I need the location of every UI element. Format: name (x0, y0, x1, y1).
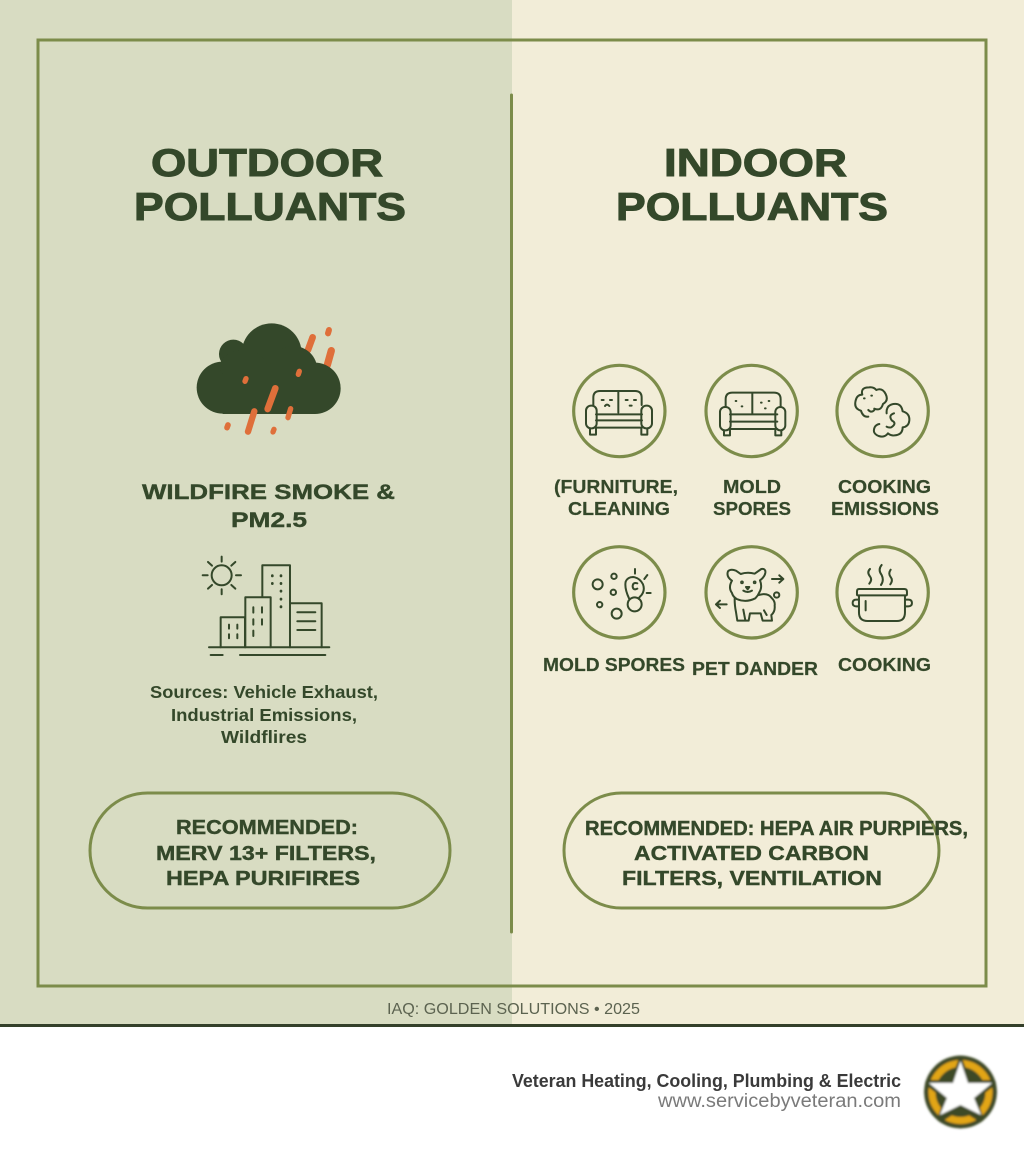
callout: outdoor recommendation: RECOMMENDED: (176, 817, 358, 839)
icon: smoke cloud with embers (197, 323, 341, 432)
footer company name: Veteran Heating, Cooling, Plumbing & Electric (512, 1071, 901, 1091)
heading: indoor pollutants: POLLUANTS (616, 186, 888, 229)
footer website: www.servicebyveteran.com (657, 1091, 901, 1112)
footer rule (0, 1024, 1024, 1027)
label: mold spores: SPORES (713, 498, 791, 519)
label: wildfire smoke (142, 480, 395, 532)
label: mold spores: MOLD (723, 476, 781, 497)
caption: source line: IAQ: GOLDEN SOLUTIONS • 2025 (387, 1001, 640, 1018)
label: mold spores (713, 476, 791, 519)
label: mold spores row two: MOLD SPORES (543, 654, 685, 675)
icon: sofa with spores (706, 365, 797, 457)
icon: stained sofa (574, 365, 665, 457)
label: cooking emissions: COOKING (838, 476, 931, 497)
label: wildfire smoke: WILDFIRE SMOKE & (142, 480, 395, 504)
panel: indoor background (512, 0, 1024, 1024)
outer frame (38, 40, 986, 986)
heading: indoor pollutants (616, 142, 888, 229)
text: pollutant sources: Wildflires (221, 727, 307, 747)
callout: outdoor recommendation: MERV 13+ FILTERS, (156, 843, 376, 865)
footer band (0, 1024, 1024, 1154)
panel: outdoor background (0, 0, 512, 1024)
heading: outdoor pollutants (134, 142, 406, 229)
text: pollutant sources (150, 682, 378, 747)
heading: indoor pollutants: INDOOR (664, 142, 847, 185)
callout: outdoor recommendation (90, 793, 450, 908)
icon: dog with dander (706, 547, 797, 638)
label: furniture cleaning: (FURNITURE, (554, 476, 678, 497)
label: cooking emissions: EMISSIONS (831, 498, 939, 519)
icon: city with sun (203, 557, 329, 655)
callout: indoor recommendation: FILTERS, VENTILATION (622, 868, 882, 890)
text: pollutant sources: Industrial Emissions, (171, 705, 357, 725)
callout: outdoor recommendation: HEPA PURIFIRES (166, 868, 360, 890)
icon: steaming pot (837, 547, 928, 638)
label: cooking emissions (831, 476, 939, 519)
label: cooking: COOKING (838, 654, 931, 675)
callout: indoor recommendation (564, 793, 968, 908)
text: pollutant sources: Sources: Vehicle Exhaust, (150, 682, 378, 702)
label: furniture cleaning: CLEANING (568, 498, 670, 519)
center divider (510, 95, 513, 932)
label: pet dander: PET DANDER (692, 658, 818, 679)
callout: indoor recommendation: ACTIVATED CARBON (634, 843, 869, 865)
heading: outdoor pollutants: POLLUANTS (134, 186, 406, 229)
logo: veteran star badge (919, 1054, 1002, 1128)
icon: cooking fumes (837, 365, 928, 457)
label: furniture cleaning (554, 476, 678, 519)
label: wildfire smoke: PM2.5 (231, 508, 307, 532)
heading: outdoor pollutants: OUTDOOR (151, 142, 383, 185)
icon: mold spores (574, 547, 665, 638)
callout: indoor recommendation: RECOMMENDED: HEPA AIR PURPIERS, (585, 818, 968, 840)
